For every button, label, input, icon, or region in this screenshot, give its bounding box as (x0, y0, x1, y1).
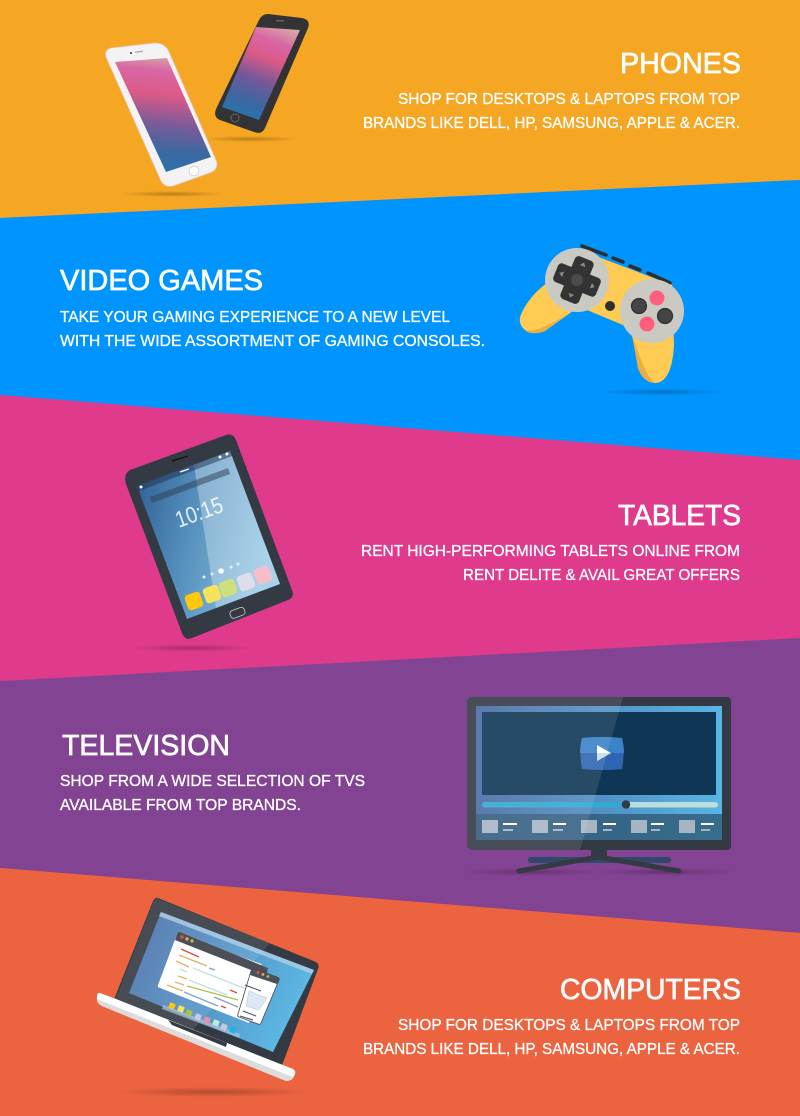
icon: game controller (520, 246, 684, 383)
text: phones description: SHOP FOR DESKTOPS & LAPTOPS FROM TOP (398, 91, 740, 108)
text: phones description (363, 91, 740, 132)
icon: black phone (215, 14, 309, 133)
heading: television: TELEVISION (62, 730, 230, 762)
icon: laptop (97, 898, 319, 1081)
icon: tablet (125, 435, 293, 639)
shadow: phones (120, 136, 298, 197)
heading: tablets: TABLETS (618, 500, 741, 532)
text: video games description: WITH THE WIDE ASSORTMENT OF GAMING CONSOLES. (60, 333, 485, 350)
text: phones description: BRANDS LIKE DELL, HP, SAMSUNG, APPLE & ACER. (363, 115, 740, 132)
shadow: tablet (131, 644, 255, 652)
text: television description: SHOP FROM A WIDE SELECTION OF TVS (60, 773, 365, 790)
shadow: television (460, 868, 735, 876)
text: computers description: SHOP FOR DESKTOPS & LAPTOPS FROM TOP (398, 1017, 740, 1034)
text: television description (60, 773, 365, 814)
panel: phones (0, 0, 800, 218)
icon: television (467, 697, 731, 871)
panel: television (0, 638, 800, 933)
panel: tablets (0, 395, 800, 681)
panel: video games (0, 180, 800, 460)
text: video games description: TAKE YOUR GAMING EXPERIENCE TO A NEW LEVEL (60, 309, 450, 326)
shadow: laptop (115, 1087, 311, 1097)
panel: computers (0, 868, 800, 1116)
heading: video games: VIDEO GAMES (60, 265, 263, 297)
heading: phones: PHONES (620, 48, 741, 80)
text: video games description (60, 309, 485, 350)
text: tablets description (361, 543, 740, 584)
icon: white phone (106, 43, 217, 186)
text: clock: 10:15 (172, 491, 226, 533)
text: computers description: BRANDS LIKE DELL, HP, SAMSUNG, APPLE & ACER. (363, 1041, 740, 1058)
shadow: controller (598, 388, 726, 396)
text: tablets description: RENT HIGH-PERFORMING TABLETS ONLINE FROM (361, 543, 740, 560)
text: computers description (363, 1017, 740, 1058)
text: television description: AVAILABLE FROM TOP BRANDS. (60, 797, 301, 814)
text: tablets description: RENT DELITE & AVAIL GREAT OFFERS (463, 567, 740, 584)
heading: computers: COMPUTERS (560, 974, 741, 1006)
